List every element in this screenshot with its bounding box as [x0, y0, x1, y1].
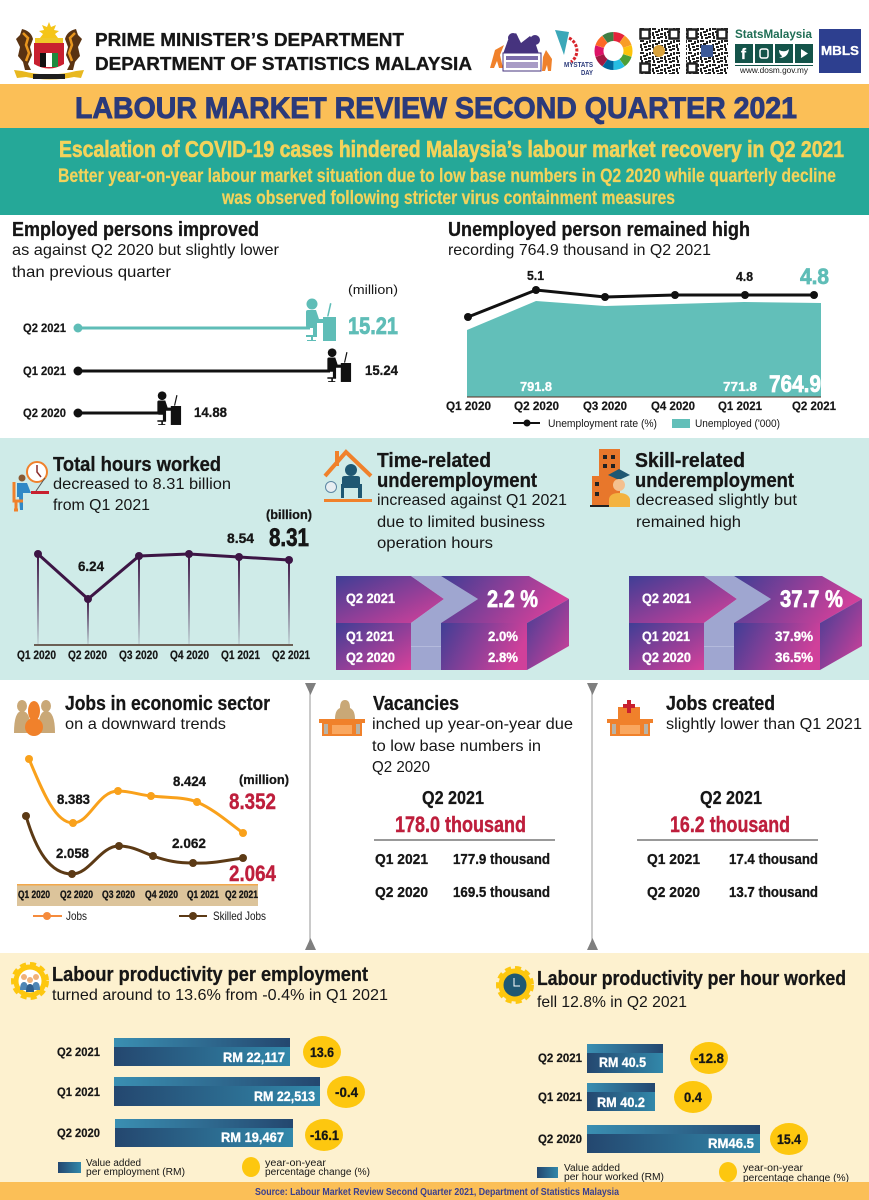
row: Q2 2021 employed: Q2 2021 — [23, 321, 66, 335]
legend: unemployment: Unemployment rate (%) — [548, 418, 657, 430]
arrow block: skill-related values: 37.7 % — [780, 586, 843, 613]
icon: house with worker — [324, 451, 372, 502]
legend: per employment: percentage change (%) — [265, 1167, 370, 1178]
legend: jobs: Skilled Jobs — [213, 909, 266, 923]
panel: jobs in economic sector — [14, 693, 289, 923]
heading: per employment: turned around to 13.6% from -0.4% in Q1 2021 — [52, 987, 388, 1004]
line chart: unemployment rate: 4.8 — [736, 269, 753, 284]
heading: jobs created: Jobs created — [666, 693, 775, 715]
figures: jobs created — [637, 788, 818, 901]
figures: jobs created: 16.2 thousand — [670, 812, 790, 837]
bar chart: per employment: RM 22,513 — [254, 1088, 315, 1104]
title banner — [0, 84, 869, 128]
panel: productivity per employment — [13, 964, 388, 1178]
icon: gear with people — [13, 964, 47, 998]
panel: unemployed persons — [446, 219, 836, 430]
bar chart: per employment: Q1 2021 — [57, 1085, 100, 1099]
line chart: jobs: 2.062 — [172, 835, 206, 851]
line chart: unemployment rate: 5.1 — [527, 268, 544, 283]
line chart: unemployment rate — [464, 264, 829, 321]
icon: building and graduate — [590, 449, 630, 507]
heading: total hours: decreased to 8.31 billion — [53, 476, 231, 493]
bar chart: per hour: RM46.5 — [708, 1135, 754, 1151]
legend: per employment: year-on-year — [265, 1158, 327, 1169]
bar chart: per employment: Q2 2020 — [57, 1126, 100, 1140]
heading: vacancies: Vacancies — [373, 693, 459, 715]
line chart: jobs: Q2 2021 — [225, 889, 258, 901]
row: Q2 2020 employed: 14.88 — [194, 404, 227, 420]
line chart: hours worked: 8.31 — [269, 524, 309, 552]
line chart: hours worked: 8.54 — [227, 530, 254, 546]
StatsMalaysia social block: StatsMalaysia — [735, 27, 812, 41]
line chart: hours worked: (billion) — [266, 507, 312, 522]
line chart: hours worked: Q2 2021 — [272, 648, 310, 662]
bar chart: per hour: RM 40.2 — [597, 1094, 645, 1110]
line chart: jobs: (million) — [239, 772, 289, 787]
figures: vacancies: 177.9 thousand — [453, 851, 550, 868]
heading: skill-related: decreased slightly but — [636, 492, 798, 509]
bar chart: per hour: Q1 2021 — [538, 1090, 582, 1104]
heading: time-related: increased against Q1 2021 — [377, 492, 567, 509]
department name: DEPARTMENT OF STATISTICS MALAYSIA — [95, 54, 472, 74]
bar chart: per employment: -0.4 — [335, 1084, 358, 1100]
heading: skill-related — [635, 450, 798, 531]
heading: time-related: operation hours — [377, 535, 493, 552]
panel: total hours worked — [14, 454, 312, 662]
heading: time-related: due to limited business — [377, 514, 545, 531]
arrow block: time-related values: Q1 2021 — [346, 628, 394, 644]
heading: time-related: underemployment — [377, 470, 537, 492]
heading: unemployed — [448, 219, 750, 259]
area chart: unemployed: 764.9 — [769, 371, 821, 398]
icon: QR code one — [639, 28, 680, 74]
heading: employed persons: than previous quarter — [12, 264, 172, 281]
heading: total hours — [53, 454, 231, 514]
footer: source: Source: Labour Market Review Second Quarter 2021, Department of Statistics Malaysia — [255, 1187, 619, 1198]
line chart: hours worked: Q2 2020 — [68, 648, 107, 662]
arrow block: time-related values: 2.2 % — [487, 586, 538, 613]
bar chart: per hour: RM 40.5 — [599, 1054, 646, 1070]
panel: jobs created — [607, 693, 862, 901]
icon: people — [14, 700, 55, 736]
x axis labels: Q3 2020 — [583, 399, 627, 413]
heading: skill-related: Skill-related — [635, 450, 745, 472]
unit label: million: (million) — [348, 282, 398, 297]
line chart: hours worked: Q1 2020 — [17, 648, 56, 662]
panel: time-related underemployment — [324, 450, 569, 670]
heading: employed persons: as against Q2 2020 but slightly lower — [12, 242, 280, 259]
bar chart: per hour: Q2 2021 — [538, 1051, 582, 1065]
icon: QR code two — [686, 28, 728, 74]
figures: vacancies: 178.0 thousand — [395, 812, 526, 837]
legend: per hour: percentage change (%) — [743, 1173, 849, 1184]
area chart: unemployed: 791.8 — [520, 379, 552, 394]
line chart: jobs: 8.352 — [229, 789, 276, 814]
line chart: hours worked: 6.24 — [78, 558, 104, 574]
legend: per employment: Value added — [86, 1158, 141, 1169]
figures: jobs created: Q2 2020 — [647, 884, 700, 901]
bar chart: per hour: -12.8 — [694, 1050, 724, 1066]
figures: vacancies: Q1 2021 — [375, 851, 428, 868]
line chart: hours worked — [17, 507, 312, 662]
icon: gear with clock — [498, 968, 532, 1002]
panel: employed persons — [12, 219, 398, 425]
line chart: jobs: Q1 2021 — [187, 889, 219, 901]
icon: MBLS logo: MBLS — [821, 43, 859, 58]
legend: jobs: Jobs — [66, 909, 87, 923]
heading: per employment — [52, 964, 388, 1004]
arrow block: skill-related values — [629, 576, 862, 670]
arrow block: time-related values: 2.8% — [488, 649, 519, 665]
arrow block: skill-related values: 36.5% — [775, 649, 814, 665]
panel: skill-related underemployment — [590, 449, 862, 670]
line chart: hours worked: Q3 2020 — [119, 648, 158, 662]
icon: jobs desk — [607, 700, 653, 736]
x axis labels: Q1 2021 — [718, 399, 762, 413]
bar chart: per employment: RM 19,467 — [221, 1129, 284, 1145]
icon: clock and worker — [14, 462, 49, 510]
bar chart: per hour — [538, 1042, 808, 1155]
department name — [95, 30, 472, 74]
heading: skill-related: remained high — [636, 514, 741, 531]
legend: unemployment — [513, 418, 780, 430]
line chart: jobs: 8.383 — [57, 791, 90, 807]
heading: jobs created: slightly lower than Q1 2021 — [666, 716, 862, 733]
legend: per employment: per employment (RM) — [86, 1167, 185, 1178]
heading: unemployed: recording 764.9 thousand in Q2 2021 — [448, 242, 711, 259]
arrow block: skill-related values: Q2 2020 — [642, 649, 691, 665]
figures: jobs created: 13.7 thousand — [729, 884, 818, 901]
heading: skill-related: underemployment — [635, 470, 794, 492]
row: Q2 2021 employed: 15.21 — [348, 313, 398, 340]
heading: employed persons: Employed persons improved — [12, 219, 259, 241]
row: Q1 2021 employed: Q1 2021 — [23, 364, 66, 378]
panel: productivity per hour — [498, 968, 849, 1184]
row: Q2 2020 employed — [23, 391, 227, 425]
arrow block: skill-related values: Q1 2021 — [642, 628, 690, 644]
bar chart: per hour: 15.4 — [777, 1131, 801, 1147]
icon: family logo — [490, 33, 552, 71]
heading: jobs created — [666, 693, 862, 733]
StatsMalaysia social block: f — [741, 46, 747, 63]
line chart: jobs: 2.064 — [229, 861, 277, 886]
arrow block: time-related values: Q2 2021 — [346, 590, 395, 606]
row: Q2 2020 employed: Q2 2020 — [23, 406, 66, 420]
x axis labels: Q2 2021 — [792, 399, 836, 413]
legend: per hour: year-on-year — [743, 1163, 804, 1174]
bar chart: per hour: 0.4 — [684, 1089, 702, 1105]
arrow block: skill-related values: 37.9% — [775, 628, 814, 644]
heading: time-related: Time-related — [377, 450, 491, 472]
row: Q2 2021 employed — [23, 298, 398, 341]
legend: per hour: per hour worked (RM) — [564, 1172, 664, 1183]
heading: jobs — [65, 693, 270, 733]
arrow block: time-related values — [336, 576, 569, 670]
subtitle banner — [0, 128, 869, 215]
legend: jobs — [33, 909, 266, 923]
line chart: jobs: Q2 2020 — [60, 889, 93, 901]
bar chart: per employment: -16.1 — [310, 1127, 339, 1143]
icon: vacancy desk — [319, 700, 365, 736]
heading: total hours: Total hours worked — [53, 454, 221, 476]
row: Q1 2021 employed: 15.24 — [365, 362, 398, 378]
x axis labels: Q2 2020 — [514, 399, 559, 413]
line chart: jobs: Q4 2020 — [145, 889, 178, 901]
icon: MyStats Day: DAY — [581, 70, 593, 77]
bar chart: per employment — [57, 1036, 365, 1151]
line chart: hours worked: Q4 2020 — [170, 648, 209, 662]
heading: vacancies — [372, 693, 573, 776]
heading: unemployed: Unemployed person remained high — [448, 219, 750, 241]
heading: jobs: Jobs in economic sector — [65, 693, 270, 715]
x axis labels: Q1 2020 — [446, 399, 491, 413]
line chart: hours worked: Q1 2021 — [221, 648, 260, 662]
StatsMalaysia social block: www.dosm.gov.my — [739, 66, 808, 75]
bar chart: per employment: RM 22,117 — [223, 1049, 285, 1065]
header — [14, 22, 861, 80]
x axis labels: Q4 2020 — [651, 399, 695, 413]
heading: per employment: Labour productivity per employment — [52, 964, 368, 986]
title banner: LABOUR MARKET REVIEW SECOND QUARTER 2021 — [75, 92, 797, 125]
heading: vacancies: inched up year-on-year due — [372, 716, 573, 733]
icon: SDG wheel — [593, 31, 634, 71]
heading: jobs: on a downward trends — [65, 716, 226, 733]
bar chart: per employment: 13.6 — [310, 1044, 334, 1060]
icon: MyStats Day: MYSTATS — [564, 62, 593, 69]
heading: vacancies: Q2 2020 — [372, 759, 430, 776]
icon: coat of arms — [14, 22, 84, 80]
figures: jobs created: 17.4 thousand — [729, 851, 818, 868]
heading: time-related — [377, 450, 567, 552]
row: Q1 2021 employed — [23, 348, 398, 382]
line chart: jobs: 2.058 — [56, 845, 89, 861]
bar chart: per hour: Q2 2020 — [538, 1132, 582, 1146]
area chart: unemployed: 771.8 — [723, 379, 757, 394]
heading: employed persons — [12, 219, 280, 281]
heading: per hour — [537, 968, 846, 1011]
area chart: unemployed — [467, 301, 821, 398]
x axis labels — [446, 399, 836, 413]
figures: vacancies — [374, 788, 555, 901]
bar chart: per employment: Q2 2021 — [57, 1045, 100, 1059]
department name: PRIME MINISTER’S DEPARTMENT — [95, 30, 404, 50]
legend: per employment — [58, 1157, 370, 1178]
legend: per hour — [537, 1162, 849, 1184]
figures: vacancies: Q2 2020 — [375, 884, 428, 901]
panel: vacancies — [319, 693, 573, 901]
icon: MBLS logo — [819, 29, 861, 73]
footer: source — [0, 1182, 869, 1200]
heading: vacancies: to low base numbers in — [372, 738, 541, 755]
heading: per hour: fell 12.8% in Q2 2021 — [537, 994, 687, 1011]
line chart: jobs: Q1 2020 — [18, 889, 50, 901]
line chart: jobs: 8.424 — [173, 773, 206, 789]
figures: jobs created: Q1 2021 — [647, 851, 700, 868]
panel: hours and underemployment background — [0, 438, 869, 680]
legend: unemployment: Unemployed ('000) — [695, 418, 780, 430]
icon: MyStats Day — [555, 30, 593, 77]
panel: labour productivity background — [0, 953, 869, 1182]
figures: vacancies: 169.5 thousand — [453, 884, 550, 901]
figures: vacancies: Q2 2021 — [422, 788, 484, 808]
line chart: unemployment rate: 4.8 — [800, 264, 829, 289]
StatsMalaysia social block — [735, 27, 813, 75]
arrow block: time-related values: Q2 2020 — [346, 649, 395, 665]
arrow block: time-related values: 2.0% — [488, 628, 519, 644]
heading: total hours: from Q1 2021 — [53, 497, 150, 514]
figures: jobs created: Q2 2021 — [700, 788, 762, 808]
arrow block: skill-related values: Q2 2021 — [642, 590, 691, 606]
line chart: jobs: Q3 2020 — [102, 889, 135, 901]
line chart: jobs — [17, 755, 289, 906]
legend: per hour: Value added — [564, 1163, 620, 1174]
subtitle banner: was observed following stricter virus containment measures — [221, 188, 675, 209]
